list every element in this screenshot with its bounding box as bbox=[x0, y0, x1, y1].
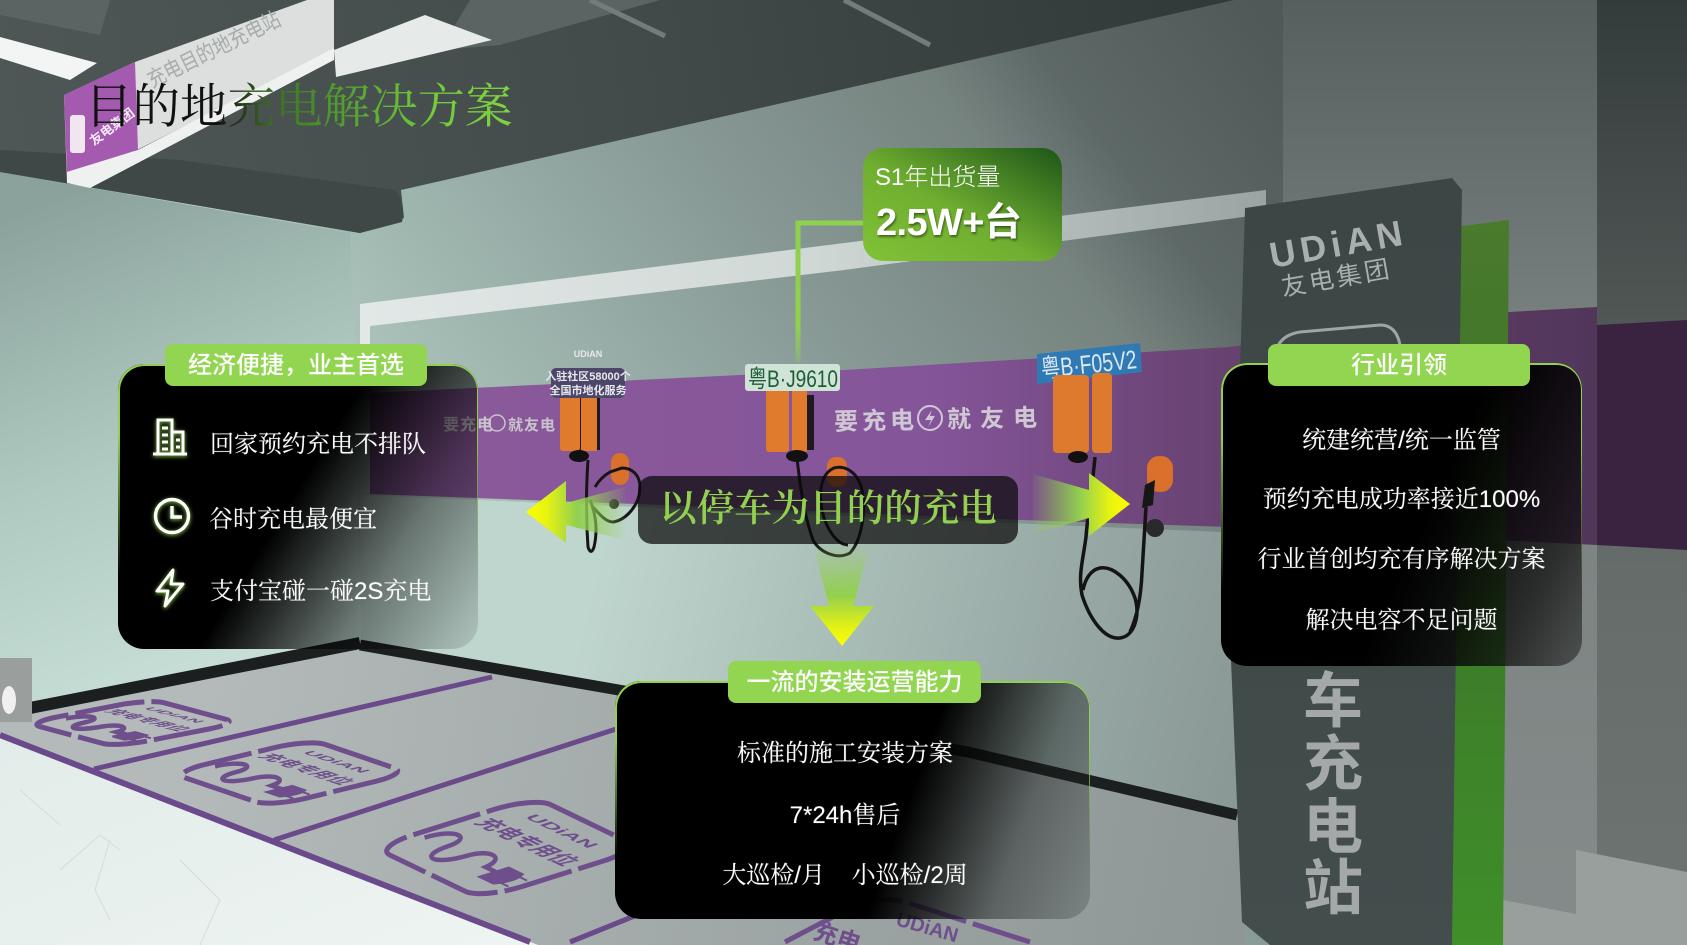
charger one: 全国市地化服务 bbox=[550, 383, 626, 397]
heading: industry leader bbox=[1268, 344, 1530, 386]
charger one: UDiAN bbox=[574, 349, 602, 359]
ceiling lights bbox=[334, 15, 492, 77]
hanging sign bbox=[64, 0, 334, 188]
wall slogan left: 就友电 bbox=[508, 416, 556, 434]
charger three bbox=[1037, 343, 1173, 638]
callout label: S1年出货量 bbox=[875, 164, 1000, 191]
callout number: 2.5W+台 bbox=[876, 202, 1021, 244]
panel: economical and convenient bbox=[118, 364, 478, 649]
text: standard installation: 标准的施工安装方案 bbox=[737, 740, 953, 767]
heading: economical and convenient bbox=[165, 344, 427, 386]
right column bbox=[1283, 0, 1597, 945]
icon: clock bbox=[150, 496, 194, 538]
far right purple band bbox=[1597, 320, 1687, 550]
charger one bbox=[545, 349, 640, 552]
text: inspections: 大巡检/月 小巡检/2周 bbox=[722, 862, 968, 889]
text: ordered charging: 行业首创均充有序解决方案 bbox=[1258, 546, 1546, 573]
charger one: 入驻社区58000个 bbox=[545, 369, 631, 383]
pillar vertical text: 车 bbox=[1303, 668, 1363, 735]
sign pillar bbox=[1231, 178, 1462, 945]
lower back wall bbox=[360, 495, 1290, 830]
central label: 以停车为目的的充电 bbox=[659, 489, 997, 530]
left wall bbox=[0, 172, 362, 720]
right floor bbox=[1503, 850, 1687, 945]
left arrow bbox=[526, 481, 625, 543]
heading: industry leader: 行业引领 bbox=[1351, 352, 1447, 379]
floor boundary line bbox=[0, 735, 530, 942]
charger two bbox=[745, 364, 864, 556]
ceiling bbox=[0, 0, 1234, 233]
pillar logo: UDiAN bbox=[1266, 212, 1405, 276]
parking dividers bbox=[94, 665, 830, 942]
sign pillar green strip bbox=[1449, 220, 1509, 945]
icon: lightning bolt bbox=[152, 566, 188, 612]
panel: industry leader bbox=[1221, 363, 1582, 666]
heading: economical and convenient: 经济便捷，业主首选 bbox=[188, 352, 404, 379]
icon: building bbox=[150, 416, 190, 460]
hanging sign: 友电集团 bbox=[87, 105, 137, 148]
callout: annual shipments bbox=[875, 164, 1021, 244]
wall slogan right: 就友电 bbox=[947, 405, 1046, 434]
back wall bbox=[0, 0, 1290, 945]
pillar vertical text bbox=[1303, 604, 1363, 922]
wall slogan left bbox=[443, 415, 556, 434]
floor stencil four bbox=[785, 900, 1030, 945]
pillar vertical text: 汽 bbox=[1303, 604, 1363, 671]
pillar vertical text: 电 bbox=[1303, 794, 1363, 861]
ceiling beams bbox=[440, 0, 660, 50]
charger three: 粤B·F05V2 bbox=[1039, 344, 1138, 384]
text: reservation: 回家预约充电不排队 bbox=[210, 431, 426, 458]
text: alipay: 支付宝碰一碰2S充电 bbox=[210, 578, 431, 605]
pillar outline shape bbox=[1275, 325, 1401, 360]
heading: installation and operations bbox=[728, 661, 981, 703]
right arrow bbox=[1033, 473, 1130, 536]
pillar vertical text: 充 bbox=[1303, 731, 1363, 798]
text: success rate: 预约充电成功率接近100% bbox=[1263, 486, 1540, 513]
text: capacity: 解决电容不足问题 bbox=[1306, 607, 1498, 634]
charger two: 粤B·J9610 bbox=[748, 366, 838, 393]
text: after-sales: 7*24h售后 bbox=[790, 802, 900, 829]
purple band bbox=[370, 307, 1597, 545]
floor box bbox=[0, 658, 32, 722]
pillar logo: 友电集团 bbox=[1279, 255, 1394, 302]
floor stencil two bbox=[170, 739, 410, 807]
pillar vertical text: 站 bbox=[1303, 855, 1363, 922]
floor stencil three bbox=[374, 797, 642, 899]
floor bbox=[0, 648, 1245, 945]
connector line bbox=[798, 223, 863, 362]
wall slogan right bbox=[834, 404, 1046, 436]
heading: installation and operations: 一流的安装运营能力 bbox=[746, 669, 962, 696]
title: 目的地充电解决方案 bbox=[85, 82, 512, 134]
down arrow bbox=[810, 545, 874, 646]
panel: installation and operations bbox=[615, 681, 1090, 919]
stat box background bbox=[863, 148, 1062, 261]
marble veins bbox=[20, 790, 220, 945]
floor stencil one bbox=[26, 699, 240, 747]
text: off-peak: 谷时充电最便宜 bbox=[209, 506, 377, 533]
text: unified: 统建统营/统一监管 bbox=[1302, 427, 1501, 454]
wall slogan left: 要充电 bbox=[443, 415, 494, 434]
marble floor bbox=[0, 735, 538, 945]
central label bbox=[638, 476, 1018, 544]
ceiling duct bbox=[0, 150, 403, 233]
skirting boards bbox=[360, 645, 1237, 815]
far right column bbox=[1597, 0, 1687, 945]
white wall trim bbox=[360, 190, 1266, 365]
wall slogan right: 要充电 bbox=[834, 407, 918, 436]
